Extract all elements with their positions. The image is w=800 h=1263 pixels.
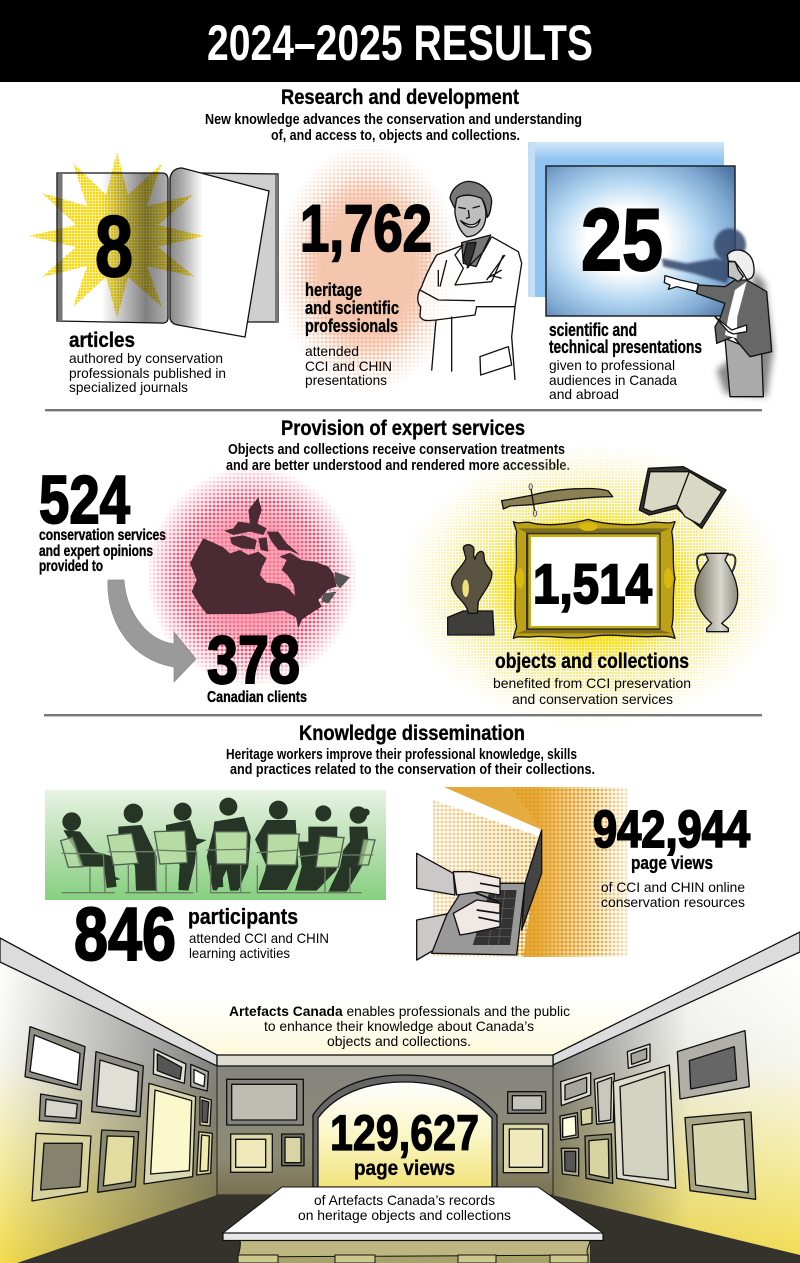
yellow halftone glow	[397, 443, 787, 727]
map of Canada	[190, 497, 350, 628]
panel: gallery room	[0, 932, 800, 1263]
text: presentations caption: given to professional	[549, 357, 675, 373]
panel: professionals	[276, 143, 522, 393]
text: professionals caption: attended	[305, 343, 359, 359]
panel: presentations	[528, 142, 773, 402]
text: participants caption: participants	[188, 904, 298, 929]
icon: sculpture	[448, 545, 494, 635]
text: Artefacts Canada intro	[229, 1003, 570, 1049]
illustration: gallery walls and floor	[0, 932, 800, 1263]
section heading: provision of expert services	[226, 417, 570, 474]
illustration: seated group silhouettes	[45, 790, 386, 900]
text: participants caption	[188, 904, 329, 961]
peach halftone glow	[276, 143, 460, 393]
text: professionals caption: professionals	[305, 316, 398, 336]
text: presentations caption: technical presentations	[549, 337, 702, 357]
number: 846: 846	[74, 892, 176, 976]
icon: sword	[502, 484, 613, 516]
text: articles caption: articles	[69, 329, 135, 352]
wall frames: centre right and right wall	[503, 1031, 756, 1199]
text: online caption	[601, 853, 745, 910]
light-blue back panel	[528, 142, 724, 297]
icon: yellow starburst	[29, 152, 204, 318]
illustration: hands typing on laptop	[417, 830, 542, 960]
title banner: 2024–2025 RESULTS	[207, 15, 593, 71]
text: participants caption: attended CCI and CHIN	[189, 930, 329, 946]
text: objects caption	[493, 650, 691, 707]
text: online caption: of CCI and CHIN online	[601, 879, 745, 895]
text: Artefacts Canada intro: to enhance their knowledge about Canada’s	[264, 1018, 534, 1034]
text: articles caption: authored by conservation	[69, 350, 223, 366]
text: presentations caption	[549, 320, 702, 402]
text: objects caption: benefited from CCI preservation	[493, 675, 691, 691]
text: Artefacts Canada intro: objects and collections.	[327, 1033, 471, 1049]
text: articles caption: professionals published in	[69, 365, 226, 381]
panel: learning participants	[45, 790, 386, 976]
text: objects caption: and conservation services	[512, 691, 673, 707]
text: table caption: on heritage objects and collections	[298, 1207, 511, 1223]
text: professionals caption: and scientific	[305, 298, 399, 318]
illustration: presenter with shadow	[662, 228, 773, 397]
text: clients caption: Canadian clients	[207, 689, 307, 706]
pale glow above back wall	[115, 1000, 663, 1055]
arrow: curved grey arrow	[108, 580, 196, 682]
text: presentations caption: scientific and	[549, 320, 637, 340]
title banner	[0, 0, 800, 82]
text: professionals caption	[305, 280, 399, 388]
number: 1,514: 1,514	[533, 552, 652, 615]
text: articles caption	[69, 329, 226, 395]
orange halftone light beam	[433, 787, 628, 957]
section heading: knowledge dissemination: Knowledge dissemination	[299, 722, 525, 745]
text: services caption: conservation services	[39, 527, 166, 544]
text: participants caption: learning activities	[189, 945, 290, 961]
text: page views label: page views	[354, 1157, 455, 1180]
text: table caption: of Artefacts Canada’s records	[314, 1192, 495, 1208]
text: objects caption: objects and collections	[495, 650, 689, 673]
text: articles caption: specialized journals	[69, 379, 188, 395]
table	[223, 1187, 603, 1263]
number: 942,944: 942,944	[593, 801, 750, 859]
text: services caption: provided to	[39, 558, 103, 575]
text: professionals caption: heritage	[305, 280, 362, 300]
number: 25: 25	[581, 190, 663, 289]
illustration: museum objects and gold frame	[448, 467, 738, 638]
section heading: knowledge dissemination: Heritage workers improve their professional knowledge, skills	[226, 747, 577, 763]
text: presentations caption: audiences in Canada	[549, 372, 677, 388]
section heading: research and development: Research and development	[281, 86, 519, 109]
text: online caption: page views	[631, 853, 713, 873]
icon: vase	[695, 553, 738, 632]
section heading: research and development: of, and access to, objects and collections.	[271, 128, 520, 144]
icon: open book	[57, 168, 278, 337]
number: 524: 524	[39, 462, 130, 538]
text: services caption: and expert opinions	[39, 543, 153, 560]
section heading: knowledge dissemination	[226, 722, 595, 778]
text: professionals caption: presentations	[305, 372, 387, 388]
panel: Canadian clients	[39, 462, 358, 706]
section heading: research and development	[205, 86, 582, 144]
section heading: provision of expert services: Objects and collections receive conservation treatments	[228, 442, 565, 458]
section heading: provision of expert services: and are better understood and rendered more accessible.	[226, 458, 570, 474]
text: table caption	[298, 1192, 511, 1223]
section heading: knowledge dissemination: and practices related to the conservation of their collections.	[230, 762, 595, 778]
projection screen	[546, 166, 735, 316]
section heading: research and development: New knowledge advances the conservation and understanding	[205, 112, 582, 128]
number: 129,627: 129,627	[330, 1105, 479, 1161]
number: 1,762: 1,762	[300, 191, 432, 265]
icon: book	[639, 467, 726, 528]
text: services caption	[39, 527, 166, 575]
section heading: provision of expert services: Provision of expert services	[281, 417, 525, 440]
wall frames: left and centre	[25, 1027, 304, 1201]
gold picture frame	[513, 519, 675, 638]
text: online caption: conservation resources	[601, 894, 745, 910]
number: 378: 378	[207, 622, 300, 698]
panel: online page views	[417, 787, 750, 960]
text: presentations caption: and abroad	[549, 386, 619, 402]
text: professionals caption: CCI and CHIN	[305, 358, 392, 374]
pink halftone glow	[146, 466, 358, 686]
number: 8: 8	[95, 199, 133, 295]
text: Artefacts Canada intro: Artefacts Canada enables professionals and the public	[229, 1003, 570, 1019]
illustration: scientist in lab coat	[418, 181, 522, 380]
panel: articles	[29, 152, 278, 395]
panel: objects and collections	[397, 443, 787, 727]
